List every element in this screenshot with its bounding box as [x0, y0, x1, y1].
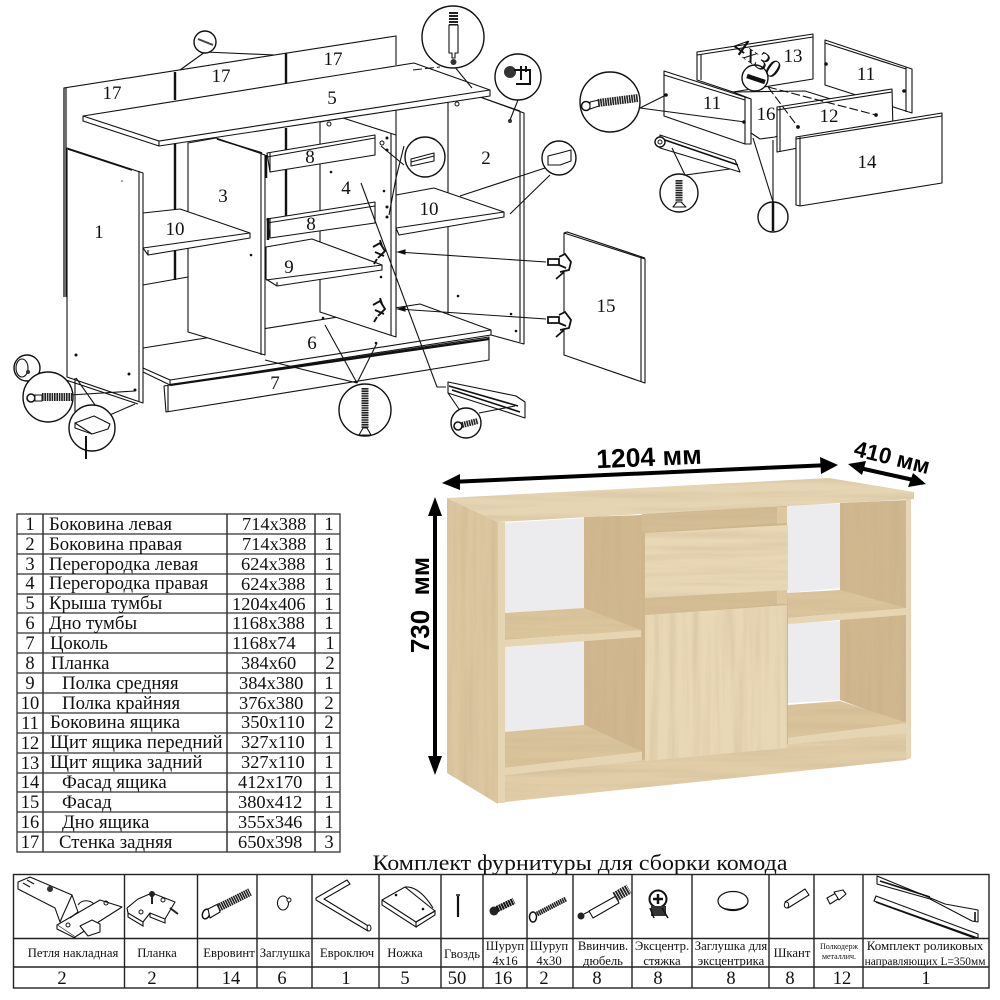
panel 10: right shelf [396, 188, 504, 235]
part quantities: 3 [324, 833, 334, 853]
row numbers: 17 [21, 833, 39, 853]
row numbers: 4 [25, 574, 35, 594]
item labels: Шуруп [486, 939, 524, 953]
icon: shelf pin [827, 890, 846, 904]
part names: Полка средняя [62, 673, 179, 694]
door hinges [548, 254, 571, 337]
item quantities: 1 [341, 969, 351, 989]
part sizes: 1168x388 [232, 613, 305, 633]
panel 17: back walls [64, 36, 396, 308]
part names: Планка [51, 653, 110, 674]
callout: cam [495, 54, 541, 100]
panel 10: left shelf: 10 [166, 219, 184, 240]
part quantities: 1 [324, 813, 334, 833]
item quantities: 2 [57, 969, 67, 989]
part quantities: 2 [325, 654, 335, 674]
part sizes: 380x412 [238, 792, 302, 812]
icon: hinge [18, 877, 122, 938]
icon: nail [456, 895, 460, 917]
item quantities: 2 [147, 969, 157, 989]
part quantities: 1 [325, 634, 335, 654]
plinth [505, 733, 906, 802]
part names [49, 514, 222, 853]
item labels: Планка [137, 946, 177, 960]
table grid [17, 514, 340, 852]
parts table [17, 514, 340, 853]
callout: nail [758, 202, 788, 232]
part names: Стенка задняя [59, 832, 173, 853]
callout: rail screw [451, 408, 481, 438]
title: hardware kit: Комплект фурнитуры для сборки комода [372, 850, 788, 875]
item quantities: 14 [222, 969, 240, 989]
item labels: Эксцентр. [635, 939, 689, 953]
item labels: Полкодерж [820, 942, 859, 951]
gap post [777, 507, 787, 604]
item quantities [57, 969, 931, 989]
part quantities: 1 [324, 535, 334, 555]
panel 10: right shelf: 10 [420, 199, 438, 220]
panel 14: drawer face: 14 [858, 152, 877, 173]
part names: Боковина правая [49, 534, 182, 555]
callout: leg [69, 405, 115, 459]
part sizes: 327x110 [241, 752, 305, 772]
item quantities: 8 [592, 969, 602, 989]
part quantities: 2 [324, 713, 334, 733]
part sizes: 1204x406 [232, 594, 306, 614]
callout: rail screw [660, 174, 698, 212]
inner shaded partitions [584, 500, 908, 752]
part sizes: 350x110 [241, 712, 305, 732]
centre recess above the drawer [642, 507, 786, 615]
row numbers: 1 [25, 515, 35, 535]
panel 1: left side [67, 148, 143, 403]
panel 13: drawer rear: 13 [784, 46, 802, 67]
row numbers: 12 [21, 734, 39, 754]
callout: dowel [405, 137, 445, 177]
panel 6: bottom shelf [143, 304, 491, 385]
panel 3: left partition: 3 [218, 186, 228, 207]
row numbers: 13 [21, 754, 39, 774]
part sizes: 327x110 [241, 732, 305, 752]
icon: euro screw [201, 892, 250, 920]
icon: euro key [316, 880, 371, 931]
part names: Дно тумбы [49, 613, 137, 634]
panel 13: drawer rear [697, 34, 813, 92]
part names: Полка крайняя [62, 693, 181, 714]
exploded assembly diagram: cabinet [14, 6, 645, 459]
row numbers [21, 515, 39, 853]
part names: Боковина левая [49, 514, 172, 535]
exploded assembly diagram: drawer [580, 31, 942, 232]
part names: Крыша тумбы [49, 593, 163, 614]
callout: euro screw [23, 372, 73, 422]
callout: plug [14, 355, 40, 381]
open shelves: top faces [505, 590, 908, 768]
item labels: Заглушка для [695, 939, 767, 953]
item quantities: 50 [448, 969, 466, 989]
label: height: 730 мм [405, 557, 435, 653]
part quantities: 1 [324, 595, 334, 615]
panel 5: cabinet roof: 5 [327, 88, 337, 109]
part quantities: 1 [324, 674, 334, 694]
panel 11: drawer side right [824, 40, 912, 113]
row numbers: 8 [25, 654, 35, 674]
product photo: assembled sideboard [405, 436, 933, 804]
item labels: 4х16 [492, 954, 518, 968]
slide rail [448, 382, 525, 418]
part quantities: 1 [324, 555, 334, 575]
item quantities: 6 [277, 969, 287, 989]
item labels: эксцентрика [698, 954, 765, 968]
part quantities: 1 [324, 753, 334, 773]
cabinet top [447, 478, 914, 522]
panel 11: drawer side left: 11 [703, 93, 721, 114]
panel 2: right side [448, 97, 524, 344]
part sizes: 412x170 [238, 772, 302, 792]
row numbers: 6 [25, 614, 35, 634]
panel 11: drawer side left [664, 71, 751, 144]
item quantities: 16 [494, 969, 512, 989]
icon: plug [278, 896, 291, 910]
part quantities: 1 [324, 515, 334, 535]
part quantities: 1 [324, 733, 334, 753]
item quantities: 5 [400, 969, 410, 989]
item labels: Евровинт [203, 946, 255, 960]
row numbers: 2 [25, 535, 35, 555]
part names: Щит ящика задний [50, 752, 202, 773]
callout: fastener [422, 6, 484, 68]
item labels: дюбель [583, 954, 623, 968]
table grid [13, 874, 989, 988]
panel 14: drawer face [796, 113, 942, 206]
icon: leg [382, 887, 435, 927]
panel 17: back walls: 17 [324, 49, 342, 70]
panel 15: door [564, 232, 645, 383]
panel 9: middle shelf: 9 [284, 257, 294, 278]
part names: Фасад [62, 792, 112, 813]
item quantities: 12 [833, 969, 851, 989]
panel 4: right partition [320, 118, 396, 344]
item quantities: 1 [921, 969, 931, 989]
callout: small screw [742, 65, 768, 91]
label: depth: 410 мм [852, 436, 933, 479]
left outer side panel [447, 498, 498, 804]
front edges [498, 498, 911, 803]
panel 6: bottom shelf: 6 [307, 333, 317, 354]
part sizes [232, 514, 306, 852]
panel 9: middle shelf [266, 239, 382, 286]
item labels: Шкант [774, 946, 811, 960]
icon: cam cover [718, 892, 748, 910]
item labels: стяжка [643, 954, 681, 968]
panel 7: plinth [164, 337, 489, 412]
part sizes: 624x388 [241, 574, 305, 594]
part sizes: 355x346 [238, 812, 302, 832]
row numbers: 5 [25, 594, 35, 614]
arrows: hinges to partition [398, 250, 546, 319]
part sizes: 384x380 [239, 673, 303, 693]
item labels: Шуруп [530, 939, 568, 953]
part sizes: 1168x74 [232, 633, 296, 653]
item quantities: 8 [785, 969, 795, 989]
row numbers: 9 [25, 674, 35, 694]
drawer rail [655, 135, 740, 172]
part names: Боковина ящика [50, 712, 181, 733]
pointer to drawer rail [361, 183, 446, 387]
part sizes: 624x388 [241, 554, 305, 574]
row numbers: 11 [21, 714, 39, 734]
row numbers: 10 [21, 694, 39, 714]
icon: screw 4x16 [490, 901, 514, 916]
item labels: Заглушка [260, 946, 311, 960]
panel 12: drawer front [777, 89, 893, 152]
white back openings [505, 504, 840, 732]
item quantities: 2 [539, 969, 549, 989]
item quantities: 8 [726, 969, 736, 989]
part quantities: 2 [324, 694, 334, 714]
label: screw size: 4x30 [728, 31, 787, 84]
item labels [28, 938, 985, 968]
item labels: Петля накладная [28, 946, 118, 960]
part sizes: 384x60 [241, 653, 296, 673]
item labels: металлич. [822, 952, 856, 961]
part sizes: 650x398 [238, 832, 302, 852]
centre carcass backing [642, 505, 788, 765]
panel 8: upper rail: 8 [305, 147, 315, 168]
callout: shelf pin [542, 141, 576, 175]
panel 4: right partition: 4 [341, 178, 351, 199]
callout lines [60, 52, 550, 428]
part names: Перегородка правая [49, 573, 209, 594]
callout: euro screw [580, 72, 640, 132]
item labels: 4х30 [536, 954, 562, 968]
part quantities: 1 [324, 793, 334, 813]
part sizes: 376x380 [239, 693, 303, 713]
panel 2: right side: 2 [481, 148, 491, 169]
hinge plates on partition [373, 240, 385, 322]
arrow: height dimension [428, 497, 442, 775]
part names: Перегородка левая [49, 554, 199, 575]
icon: screw-in dowel [578, 889, 629, 920]
item labels: Комплект роликовых [867, 938, 984, 953]
panel 16: drawer bottom: 16 [756, 104, 776, 125]
part names: Цоколь [50, 633, 108, 654]
item labels: направляющих L=350мм [865, 956, 985, 968]
part quantities [324, 515, 335, 853]
part names: Фасад ящика [62, 772, 167, 793]
icon: dowel pin [784, 889, 809, 908]
arrow: width dimension [442, 457, 838, 490]
item labels: Евроключ [320, 946, 375, 960]
part sizes: 714x388 [242, 534, 306, 554]
panel 15: door: 15 [596, 296, 616, 317]
icon: roller slides [874, 876, 978, 938]
row numbers: 16 [21, 813, 39, 833]
icon: mounting plate [127, 891, 178, 926]
panel 10: left shelf [143, 209, 250, 255]
panel 11: drawer side right: 11 [857, 64, 875, 85]
part names: Щит ящика передний [50, 732, 222, 753]
part quantities: 1 [324, 773, 334, 793]
callout lines [640, 87, 877, 202]
arrow: depth dimension [848, 461, 926, 487]
icon: cam connector [650, 890, 668, 918]
panel 7: plinth: 7 [270, 373, 280, 394]
door [645, 605, 787, 761]
panel 17: back walls: 17 [212, 66, 230, 87]
item quantities: 8 [653, 969, 663, 989]
callout: nail [194, 31, 216, 53]
row numbers: 3 [25, 555, 35, 575]
item labels: Ввинчив. [578, 939, 628, 953]
row numbers: 15 [21, 793, 39, 813]
part quantities: 1 [324, 614, 334, 634]
label: width: 1204 мм [596, 440, 702, 474]
item labels: Гвоздь [444, 947, 480, 961]
panel 16: drawer bottom [733, 91, 850, 139]
row numbers: 7 [25, 634, 35, 654]
drawer front [645, 525, 788, 598]
panel 5: cabinet roof [83, 63, 490, 146]
panel 8: lower rail: 8 [306, 214, 316, 235]
icon: screw 4x30 [530, 899, 566, 922]
panel 12: drawer front: 12 [820, 106, 838, 127]
panel 17: back walls: 17 [102, 83, 122, 104]
row numbers: 14 [21, 773, 39, 793]
open shelves: front edges [505, 608, 908, 775]
panel 8: lower rail [267, 202, 375, 238]
hardware table [13, 874, 989, 989]
callout: long screw [339, 384, 391, 436]
item labels: Ножка [387, 946, 423, 960]
panel 8: upper rail [267, 135, 375, 172]
panel 1: left side: 1 [94, 222, 104, 243]
part quantities: 1 [324, 575, 334, 595]
part names: Дно ящика [62, 812, 150, 833]
part sizes: 714x388 [242, 514, 306, 534]
panel 3: left partition [188, 138, 268, 355]
